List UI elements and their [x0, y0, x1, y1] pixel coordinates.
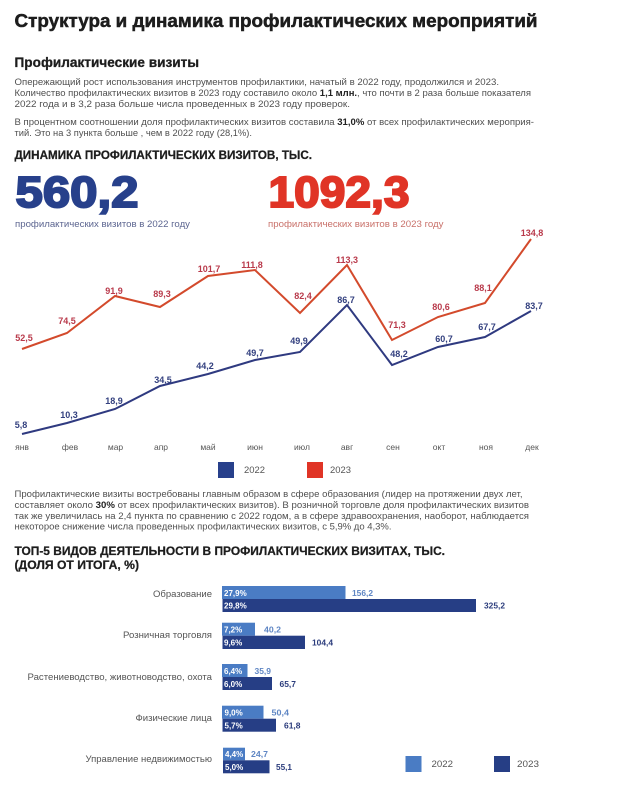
row: real estate: 5,0% — [225, 763, 243, 772]
big number: 2022 total: профилактических визитов в 2022 году — [15, 219, 191, 229]
values: 2022: 49,7 — [246, 348, 264, 358]
row: real estate: Управление недвижимостью — [86, 754, 212, 764]
text block: intro paragraph: Опережающий рост использования инструментов профилактики, начатый в 2022 году, продолжился и 2023. — [14, 77, 499, 87]
heading: visit dynamics: ДИНАМИКА ПРОФИЛАКТИЧЕСКИХ ВИЗИТОВ, ТЫС. — [14, 150, 312, 162]
values: 2023: 134,8 — [521, 228, 543, 238]
values: 2023: 113,3 — [336, 255, 358, 265]
text block: sector commentary: Профилактические визиты востребованы главным образом в сфере образования (лидер на протяжении двух лет, — [14, 489, 522, 499]
text block: sector commentary: так же увеличилась на 2,4 пункта по сравнению с 2022 годом, а в сфере здравоохранения, наоборот, наблюдается — [14, 511, 529, 521]
line chart: monthly visits — [15, 228, 543, 478]
values: 2023: 91,9 — [105, 286, 123, 296]
legend: bar chart: 2023 — [517, 759, 539, 769]
text block: share paragraph: В процентном соотношении доля профилактических визитов составила 31,0% от всех профилактических мероприя- — [14, 117, 534, 127]
values: 2023 — [15, 228, 543, 343]
row: retail: 40,2 — [264, 625, 281, 635]
axis: months: мар — [108, 442, 123, 452]
values: 2023: 71,3 — [388, 320, 406, 330]
title: Структура и динамика профилактических мероприятий — [14, 10, 538, 31]
axis: months: янв — [15, 442, 29, 452]
axis: months: дек — [525, 442, 539, 452]
row: individuals — [136, 706, 301, 732]
row: education — [153, 586, 505, 612]
big number: 2023 total: профилактических визитов в 2023 году — [268, 219, 444, 229]
legend: bar chart: 2022 — [432, 759, 453, 769]
axis: months: май — [200, 442, 216, 452]
values: 2022: 5,8 — [15, 420, 27, 430]
legend: line chart — [218, 462, 351, 478]
values: 2022: 83,7 — [525, 301, 543, 311]
values: 2023: 89,3 — [153, 289, 171, 299]
text block: intro paragraph: Количество профилактических визитов в 2023 году составило около 1,1 млн., что почти в 2 раза больше показателя — [14, 88, 531, 98]
row: real estate: 55,1 — [276, 762, 292, 772]
values: 2022: 18,9 — [105, 396, 123, 406]
legend: line chart: 2022 — [244, 465, 265, 475]
heading: top 5 activities — [14, 546, 445, 572]
row: retail: 7,2% — [224, 626, 242, 635]
axis: months: окт — [433, 442, 445, 452]
axis: months: сен — [386, 442, 400, 452]
text block: sector commentary — [14, 489, 529, 532]
values: 2022: 67,7 — [478, 322, 496, 332]
axis: months: авг — [341, 442, 353, 452]
row: individuals: 5,7% — [224, 722, 243, 730]
row: individuals: 50,4 — [272, 708, 289, 718]
values: 2022 — [15, 295, 543, 430]
row: education: 325,2 — [484, 600, 505, 610]
axis: months — [15, 442, 539, 452]
row: real estate — [86, 748, 292, 773]
heading: top 5 activities: ТОП-5 ВИДОВ ДЕЯТЕЛЬНОСТИ В ПРОФИЛАКТИЧЕСКИХ ВИЗИТАХ, ТЫС. — [14, 546, 445, 558]
legend: line chart: 2023 — [330, 465, 351, 475]
big number: 2023 total — [268, 168, 444, 229]
values: 2022: 60,7 — [435, 334, 453, 344]
values: 2023: 111,8 — [241, 260, 263, 270]
row: agriculture: 6,0% — [224, 680, 242, 689]
row: real estate: 24,7 — [251, 749, 268, 759]
values: 2023: 82,4 — [294, 291, 312, 301]
row: education: 29,8% — [224, 602, 247, 610]
row: retail — [123, 623, 333, 649]
text block: share paragraph: тий. Это на 3 пункта больше , чем в 2022 году (28,1%). — [14, 128, 252, 138]
heading: preventive visits: Профилактические визиты — [14, 55, 199, 70]
values: 2022: 10,3 — [60, 410, 78, 420]
row: agriculture — [28, 664, 296, 690]
row: agriculture: 65,7 — [280, 679, 296, 689]
axis: months: фев — [62, 442, 79, 452]
values: 2022: 34,5 — [154, 375, 172, 385]
big number: 2022 total — [15, 168, 191, 229]
values: 2023: 88,1 — [474, 283, 492, 293]
text block: intro paragraph: 2022 года и в 3,2 раза больше числа проведенных в 2023 году проверок. — [14, 99, 350, 109]
text block: sector commentary: составляет около 30% от всех профилактических визитов). В розничной торговле доля профилактических визитов — [14, 500, 529, 510]
text block: intro paragraph — [14, 77, 531, 109]
bar chart: top 5 activities — [28, 586, 539, 773]
row: agriculture: 6,4% — [224, 667, 242, 676]
axis: months: июн — [247, 442, 263, 452]
row: real estate: 4,4% — [225, 750, 243, 759]
big number: 2022 total: 560,2 — [16, 168, 138, 217]
text block: share paragraph — [14, 117, 534, 138]
values: 2023: 52,5 — [15, 333, 33, 343]
row: education: Образование — [153, 589, 212, 599]
row: agriculture: Растениеводство, животноводство, охота — [28, 672, 212, 682]
row: agriculture: 35,9 — [254, 666, 271, 676]
row: retail: Розничная торговля — [123, 630, 212, 640]
values: 2022: 48,2 — [390, 349, 408, 359]
values: 2022: 44,2 — [196, 361, 214, 371]
row: individuals: Физические лица — [136, 713, 212, 723]
row: individuals: 9,0% — [224, 708, 243, 718]
row: education: 27,9% — [224, 589, 247, 598]
heading: top 5 activities: (ДОЛЯ ОТ ИТОГА, %) — [14, 560, 139, 572]
row: individuals: 61,8 — [284, 720, 301, 730]
values: 2022: 49,9 — [290, 336, 308, 346]
values: 2023: 74,5 — [58, 316, 76, 326]
axis: months: ноя — [479, 442, 493, 452]
row: retail: 9,6% — [224, 639, 242, 648]
line: 2022 — [22, 305, 531, 434]
values: 2023: 80,6 — [432, 302, 450, 312]
axis: months: апр — [154, 442, 168, 452]
row: retail: 104,4 — [312, 638, 333, 648]
big number: 2023 total: 1092,3 — [268, 168, 410, 217]
text block: sector commentary: некоторое снижение числа проведенных профилактических визитов, с 5,9% до 4,3%. — [14, 522, 392, 532]
row: education: 156,2 — [352, 588, 373, 598]
values: 2022: 86,7 — [337, 295, 355, 305]
values: 2023: 101,7 — [198, 264, 220, 274]
legend: bar chart — [406, 756, 539, 772]
line: 2023 — [22, 239, 531, 349]
axis: months: июл — [294, 442, 310, 452]
